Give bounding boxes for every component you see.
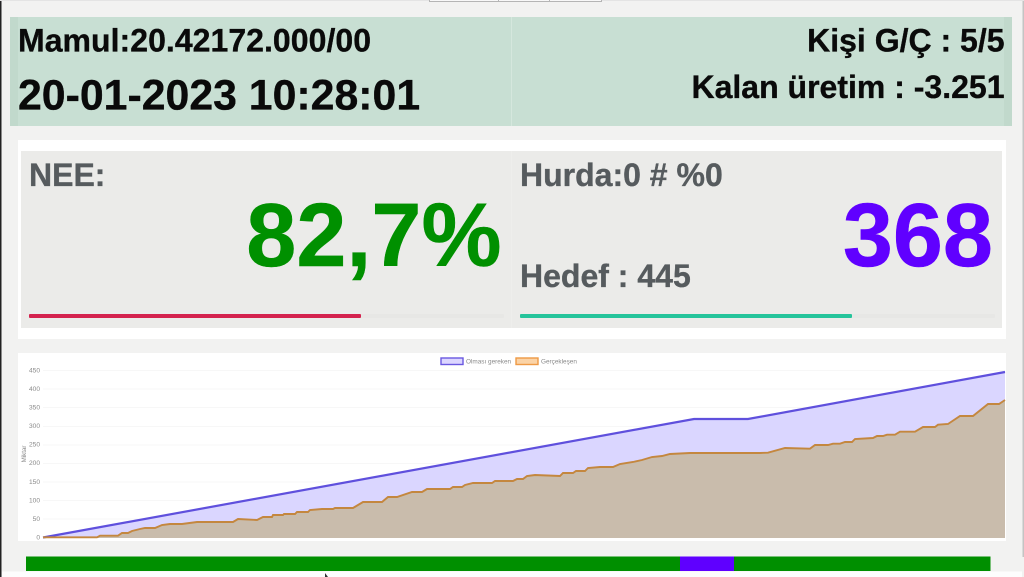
production progress bar [520,314,995,318]
target label: Hedef : 445 [520,258,691,294]
card: NEE [29,157,504,318]
panel: area chart [18,353,1006,542]
legend [441,358,577,366]
y axis labels: 400 [29,386,40,393]
personnel count: Kişi G/Ç : 5/5 [807,22,1004,58]
NEE label: NEE: [29,157,105,193]
y axis title: Miktar [21,446,28,462]
y axis labels: 450 [29,368,40,374]
actual series [43,400,1005,538]
mouse cursor [325,573,328,577]
panel: KPI cards [18,140,1006,339]
y axis labels: 50 [33,516,40,523]
y axis labels: 200 [29,460,40,467]
product code: Mamul:20.42172.000/00 [18,22,371,58]
y axis labels: 300 [29,423,40,430]
legend: Olması gereken [466,358,512,366]
y axis labels: 0 [36,534,40,542]
card: production [520,157,995,318]
y axis labels: 350 [29,404,40,412]
produced count: 368 [843,186,993,286]
NEE progress bar [29,314,504,318]
date and time: 20-01-2023 10:28:01 [18,72,420,120]
panel: header [10,17,1012,126]
browser tabs [430,0,602,2]
remaining production: Kalan üretim : -3.251 [692,69,1004,105]
NEE value: 82,7% [246,186,502,286]
y axis labels: 100 [29,498,40,504]
scrap label: Hurda:0 # %0 [520,157,723,193]
legend: Gerçekleşen [541,358,577,366]
y axis labels: 250 [29,442,40,448]
status timeline bar [26,556,990,571]
y axis labels: 150 [29,479,40,486]
y axis labels [29,368,40,542]
planned series [43,372,1005,538]
